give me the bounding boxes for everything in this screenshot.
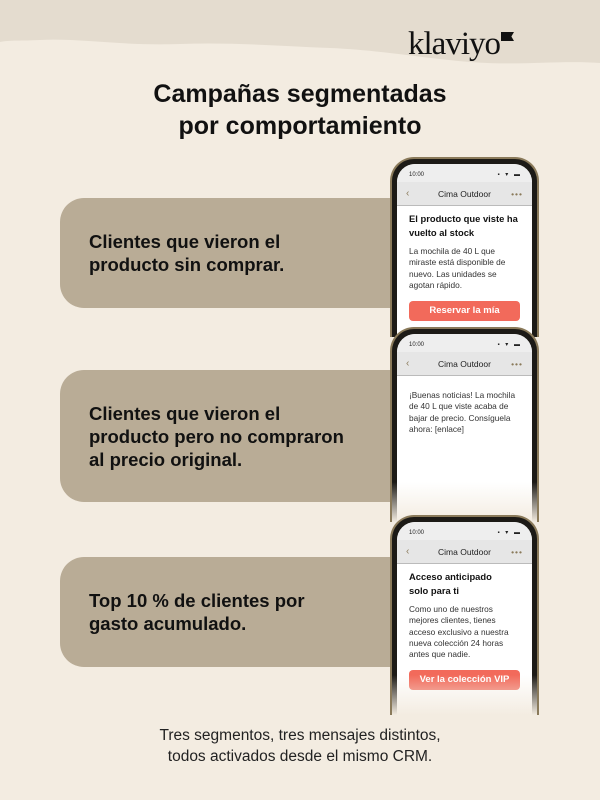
top band bbox=[0, 0, 600, 64]
phone 2: ‹ bbox=[406, 358, 409, 369]
footer caption: Tres segmentos, tres mensajes distintos, bbox=[159, 727, 441, 744]
phone 1: La mochila de 40 L que miraste está disponible de nuevo. Las unidades se agotan rápido. bbox=[409, 246, 505, 290]
phone 1: Reservar la mía bbox=[429, 305, 500, 316]
panel: segment 3: Top 10 % de clientes por bbox=[89, 590, 305, 611]
panel: segment 3 bbox=[60, 557, 400, 667]
panel: segment 2: producto pero no compraron bbox=[89, 426, 344, 446]
phone 1: ‹ bbox=[406, 188, 409, 199]
phone 3: Como uno de nuestros mejores clientes, tienes acceso exclusivo a nuestra nueva colección 24 horas antes que nadie. bbox=[409, 604, 509, 659]
phone 1 bbox=[390, 157, 539, 337]
footer caption bbox=[159, 727, 441, 765]
phone 1: El producto que viste ha vuelto al stock bbox=[409, 213, 518, 238]
panel: segment 3: gasto acumulado. bbox=[89, 613, 246, 634]
footer caption: todos activados desde el mismo CRM. bbox=[168, 748, 432, 765]
phone 3 bbox=[390, 515, 539, 715]
phone 3: 10:00 bbox=[409, 530, 424, 536]
phone 1: 10:00 bbox=[409, 172, 424, 178]
panel: segment 2: al precio original. bbox=[89, 448, 242, 470]
panel: segment 2 bbox=[60, 370, 400, 502]
phone 2: Cima Outdoor bbox=[438, 359, 491, 369]
title: Campañas segmentadas bbox=[153, 80, 447, 108]
phone 3: Cima Outdoor bbox=[438, 547, 491, 557]
phone 1: ••• bbox=[511, 189, 523, 199]
phone 1: Cima Outdoor bbox=[438, 189, 491, 199]
phone 3: ••• bbox=[511, 547, 523, 557]
logo: klaviyo: klaviyo bbox=[408, 26, 500, 62]
panel: segment 1: Clientes que vieron el bbox=[89, 231, 280, 252]
phone 3: Acceso anticipado bbox=[409, 571, 492, 582]
phone 2: ¡Buenas noticias! La mochila de 40 L que viste acaba de bajar de precio. Consíguela ahora: [enlace] bbox=[409, 390, 515, 434]
panel: segment 1: producto sin comprar. bbox=[89, 254, 284, 275]
phone 3: ▪ ▾ ▬ bbox=[498, 530, 522, 536]
phone 1: ▪ ▾ ▬ bbox=[498, 172, 522, 178]
panel: segment 1 bbox=[60, 198, 400, 308]
phone 3: Ver la colección VIP bbox=[420, 674, 509, 685]
phone 2: 10:00 bbox=[409, 342, 424, 348]
phone 3: ‹ bbox=[406, 546, 409, 557]
title bbox=[153, 80, 447, 140]
phone 2: ••• bbox=[511, 359, 523, 369]
panel: segment 2: Clientes que vieron el bbox=[89, 402, 280, 424]
title: por comportamiento bbox=[178, 112, 422, 140]
phone 2: ▪ ▾ ▬ bbox=[498, 342, 522, 348]
phone 2 bbox=[390, 327, 539, 522]
phone 3: solo para ti bbox=[409, 585, 459, 596]
